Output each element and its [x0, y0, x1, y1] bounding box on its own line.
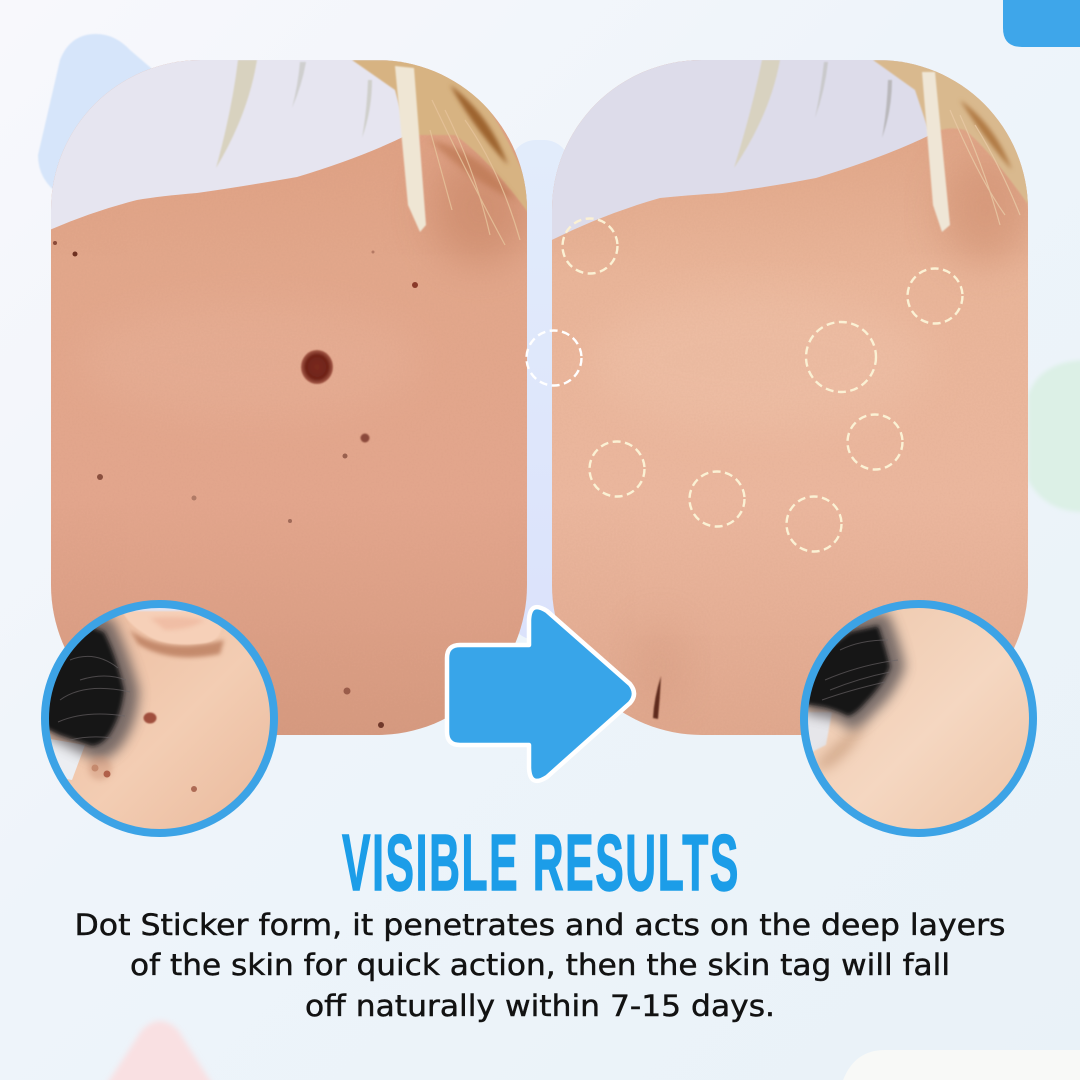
- shirt collar: [45, 60, 420, 232]
- skin shading: [80, 300, 420, 420]
- blonde hair: [216, 60, 530, 245]
- ear shadow: [130, 630, 224, 657]
- hair: [804, 626, 890, 716]
- hair fringe: [45, 615, 139, 760]
- shirt sliver: [51, 739, 85, 780]
- body text: off naturally within 7-15 days.: [305, 989, 775, 1023]
- hair highlights: [58, 656, 130, 740]
- body text: of the skin for quick action, then the skin tag will fall: [130, 948, 950, 982]
- panel: after photo: [546, 60, 1032, 735]
- hair fringe: [804, 612, 905, 730]
- body text: Dot Sticker form, it penetrates and acts on the deep layers: [74, 908, 1006, 942]
- shirt collar: [546, 60, 935, 243]
- panel: before photo: [45, 60, 530, 735]
- skin texture: [51, 60, 527, 735]
- hair: [45, 625, 124, 746]
- brown neck shade: [812, 722, 866, 770]
- ear backdrop: [132, 608, 188, 612]
- cleavage crease: [653, 676, 661, 719]
- arrow: [447, 607, 634, 781]
- blonde hair: [734, 60, 1032, 232]
- skin shading: [590, 290, 930, 430]
- shirt sliver: [808, 712, 832, 752]
- ear: [122, 611, 223, 644]
- heading: VISIBLE RESULTS: [342, 818, 740, 907]
- inset: neck after: [804, 604, 1034, 834]
- moles: [53, 241, 418, 728]
- body text: [74, 908, 1006, 1023]
- treated-area dashed circles: [526, 218, 962, 552]
- inset: neck before: [45, 604, 275, 834]
- neck spots: [144, 712, 156, 724]
- skin texture: [552, 60, 1028, 735]
